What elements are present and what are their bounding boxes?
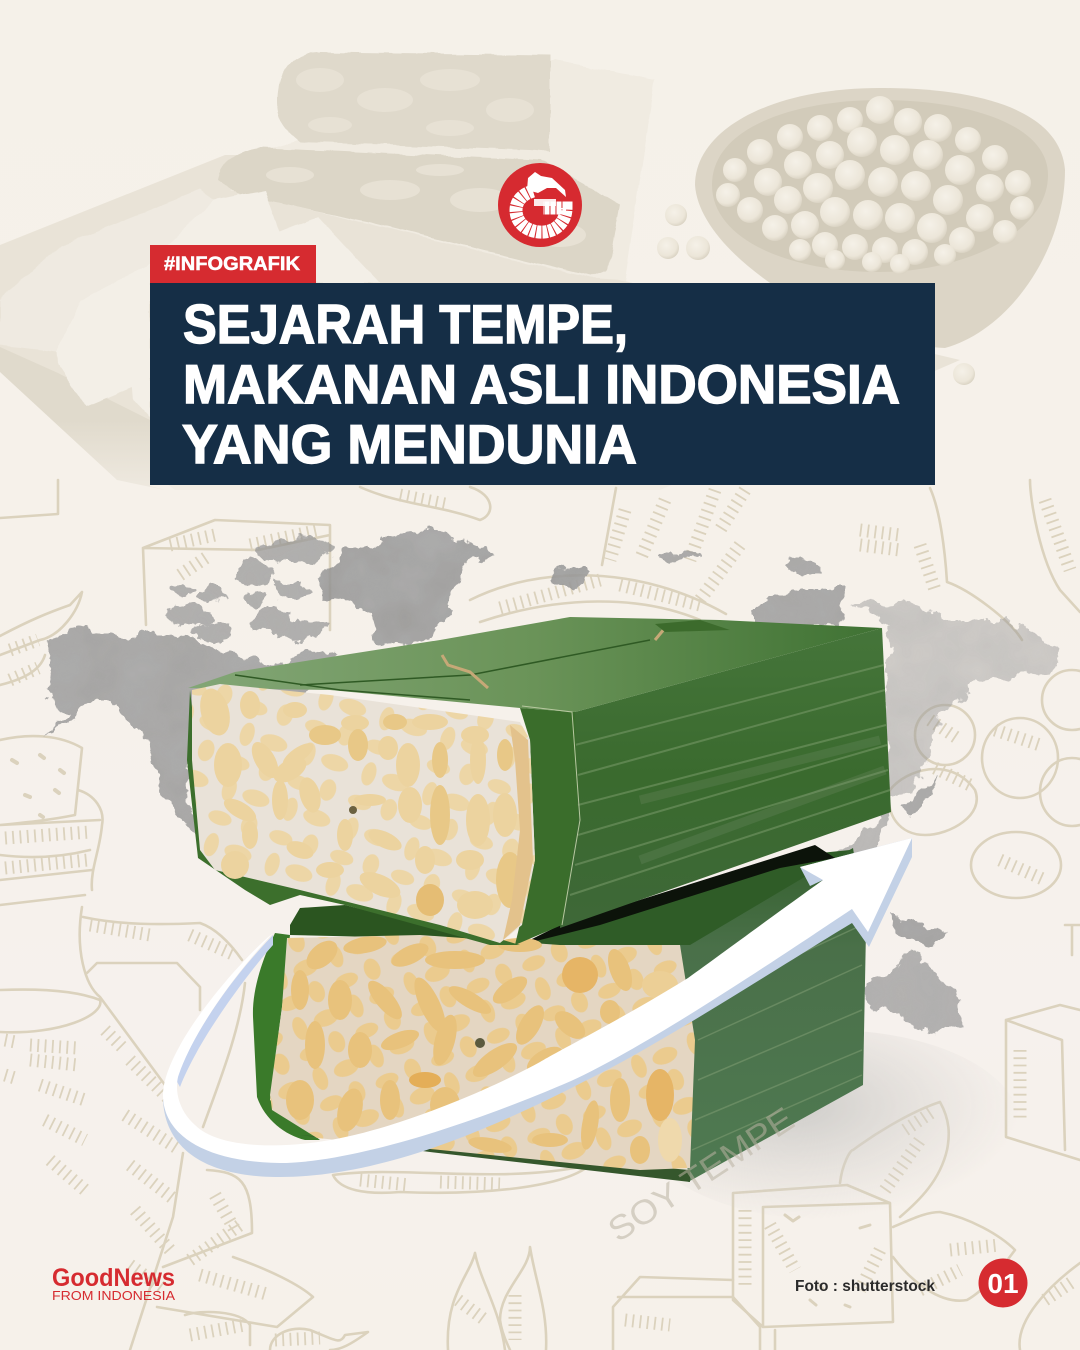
stacked cake doodle xyxy=(0,736,103,905)
brand logo GoodNews: GoodNews xyxy=(52,1264,175,1292)
tofu bottom right xyxy=(733,1185,893,1327)
hashtag tag: #INFOGRAFIK xyxy=(164,253,300,275)
tempeh package upper xyxy=(187,617,891,945)
title text: SEJARAH TEMPE, xyxy=(183,293,628,355)
Arctic islands xyxy=(166,538,333,642)
title text: YANG MENDUNIA xyxy=(182,413,637,475)
hashtag tag xyxy=(150,245,316,283)
soybeans cluster right xyxy=(889,769,977,835)
faded background photo of tempeh and soybeans xyxy=(0,52,1080,525)
soybeans in lower face xyxy=(286,933,682,1164)
small arctic island xyxy=(782,558,818,576)
North America mainland xyxy=(41,627,338,840)
arrow shadow lower band xyxy=(163,838,912,1177)
brand logo GoodNews: FROM INDONESIA xyxy=(52,1289,176,1303)
tofu upper left corner xyxy=(0,480,58,518)
leaves bottom right xyxy=(840,1102,1080,1350)
soybeans in upper face xyxy=(195,685,524,919)
world map watercolor silhouette xyxy=(41,530,1064,1035)
Svalbard xyxy=(658,552,702,560)
title panel xyxy=(150,283,935,485)
centre bean pod xyxy=(333,1165,590,1193)
tempeh blocks left xyxy=(0,190,380,417)
brand logo GoodNews xyxy=(52,1264,176,1303)
Indonesia xyxy=(888,917,950,944)
bean speck xyxy=(475,1038,485,1048)
leaf side panel xyxy=(560,628,891,928)
map shade under package xyxy=(838,815,895,855)
leaf top surface xyxy=(188,617,882,712)
Greenland xyxy=(317,530,490,645)
block surface texture xyxy=(266,68,586,247)
crease between packages xyxy=(290,905,500,945)
black gap shadow xyxy=(520,845,835,945)
Australia xyxy=(866,952,962,1035)
soy tempe doodle lettering: SOY TEMPE xyxy=(601,1100,801,1250)
cutting board xyxy=(0,347,165,490)
title text xyxy=(182,293,900,475)
leaves by brand mark xyxy=(157,1170,368,1350)
page number badge: 01 xyxy=(987,1268,1019,1299)
tofu top centre xyxy=(143,520,330,630)
tofu bottom centre xyxy=(613,1277,775,1350)
tempeh block middle xyxy=(218,148,620,276)
right tofu xyxy=(1006,1005,1080,1160)
leaf left edge xyxy=(253,933,320,1140)
pod top right xyxy=(1030,480,1080,612)
leaf top strip xyxy=(530,850,850,945)
cut face xyxy=(270,935,695,1170)
large jug doodle xyxy=(0,907,245,1350)
long pod top centre xyxy=(602,488,1022,640)
tan inner edge of face xyxy=(503,725,533,940)
twine xyxy=(442,628,665,688)
left leaf xyxy=(0,592,82,685)
plastic-wrapped slab highlight xyxy=(230,60,655,280)
soybean bowl xyxy=(657,88,1065,385)
logo badge xyxy=(498,163,582,247)
arrow body xyxy=(163,838,912,1163)
bean speck xyxy=(349,806,357,814)
curved growth arrow xyxy=(163,838,912,1177)
table surface xyxy=(0,155,960,490)
G ring xyxy=(516,191,566,232)
leaf underside rim xyxy=(187,690,520,945)
Novaya Zemlya and Siberia xyxy=(754,590,845,635)
soybeans xyxy=(716,96,1034,274)
leaf wrapper right side xyxy=(680,848,866,1182)
page number badge xyxy=(978,1258,1028,1308)
tempeh package lower xyxy=(253,845,866,1182)
tempeh block top xyxy=(277,52,550,152)
Iceland xyxy=(554,566,586,590)
arrow shadow inner tail xyxy=(176,935,273,1087)
round tray behind upper package xyxy=(470,575,726,622)
Japan xyxy=(905,775,935,815)
leaf bottom edge xyxy=(300,1135,690,1182)
cut face xyxy=(192,684,535,943)
floor shadow xyxy=(640,1030,1020,1220)
leaf front band xyxy=(515,708,578,945)
eagle head xyxy=(527,172,566,197)
loose soybeans xyxy=(657,204,975,385)
title text: MAKANAN ASLI INDONESIA xyxy=(183,353,900,415)
garlic bottom centre xyxy=(448,1247,546,1350)
pod under title xyxy=(360,487,490,520)
photo credit: Foto : shutterstock xyxy=(795,1278,935,1295)
hand-drawn food doodles xyxy=(0,480,1080,1350)
